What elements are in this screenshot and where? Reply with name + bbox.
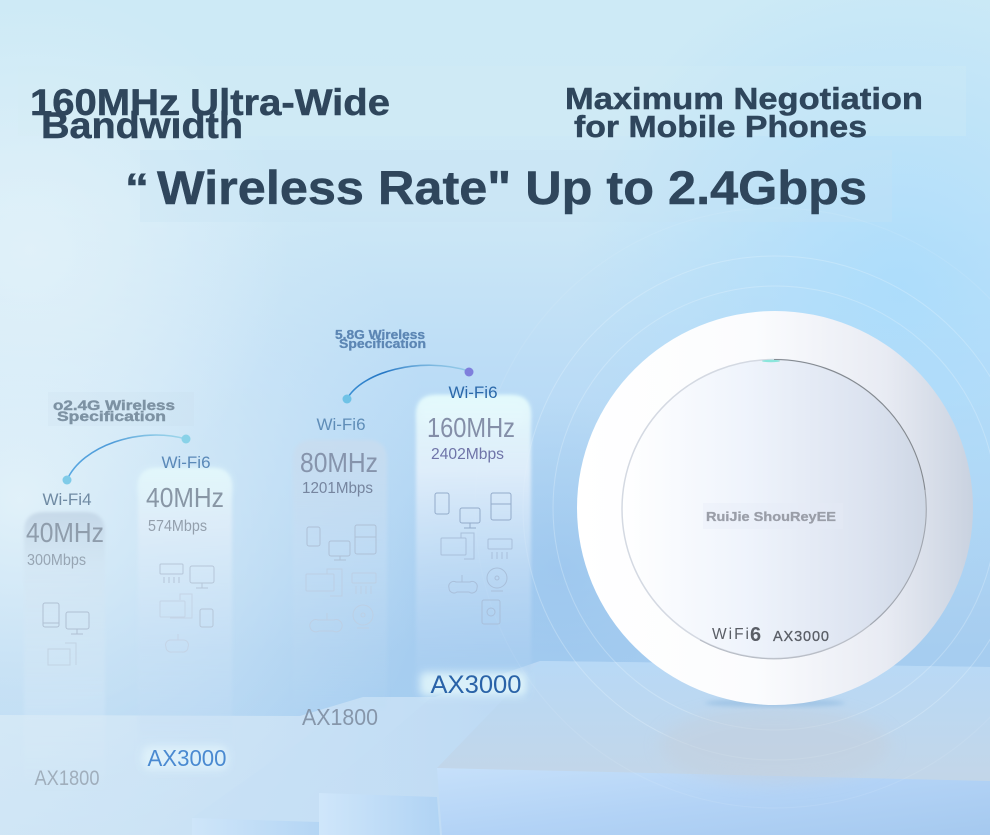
device icons: [306, 525, 376, 632]
heading: Maximum Negotiation for Mobile Phones: Maximum Negotiation: [565, 81, 923, 116]
label: 5.8G wireless specification: Specification: [339, 336, 426, 351]
stepped floor platforms: [0, 661, 990, 835]
heading: 160MHz Ultra-Wide Bandwidth: 160MHz Ultra-Wide: [30, 82, 390, 123]
column: Wi-Fi6 80MHz 1201Mbps AX1800: Wi-Fi6: [316, 415, 366, 434]
heading: Maximum Negotiation for Mobile Phones: for Mobile Phones: [574, 109, 867, 144]
column: Wi-Fi6 40MHz 574Mbps AX3000: 574Mbps: [148, 518, 207, 535]
column: Wi-Fi6 160MHz 2402Mbps AX3000: 2402Mbps: [431, 446, 504, 463]
column: Wi-Fi6 80MHz 1201Mbps AX1800: AX1800: [302, 704, 378, 730]
column: Wi-Fi6 80MHz 1201Mbps AX1800: 1201Mbps: [302, 480, 373, 497]
label: 5.8G wireless specification: [335, 327, 426, 351]
column: Wi-Fi6 160MHz 2402Mbps AX3000: Wi-Fi6: [448, 383, 498, 402]
label: 2.4G wireless specification: Specification: [57, 408, 166, 424]
column: Wi-Fi6 40MHz 574Mbps AX3000: [138, 453, 232, 771]
disk reflection: [660, 707, 890, 783]
model text: WiFi: [712, 626, 749, 643]
inner ring: [622, 359, 926, 659]
arc connector: 2.4G: [62, 434, 190, 484]
device icons: [160, 564, 214, 652]
model text: AX3000: [773, 629, 829, 645]
arc connector: 5.8G: [342, 365, 474, 404]
main title: Wireless Rate up to 2.4Gbps: Wireless Rate" Up to 2.4Gbps: [157, 161, 867, 214]
heading: Maximum Negotiation for Mobile Phones: [565, 81, 923, 144]
label: 5.8G wireless specification: 5.8G Wireless: [335, 327, 425, 342]
column: Wi-Fi6 40MHz 574Mbps AX3000: AX3000: [148, 745, 226, 771]
column: Wi-Fi4 40MHz 300Mbps AX1800: AX1800: [34, 767, 100, 790]
heading: 160MHz Ultra-Wide Bandwidth: [30, 82, 390, 146]
model text: [712, 624, 829, 646]
column: Wi-Fi6 160MHz 2402Mbps AX3000: 160MHz: [427, 412, 515, 443]
column: Wi-Fi6 160MHz 2402Mbps AX3000: [416, 383, 531, 699]
column: Wi-Fi6 80MHz 1201Mbps AX1800: 80MHz: [300, 447, 378, 478]
column: Wi-Fi4 40MHz 300Mbps AX1800: Wi-Fi4: [42, 490, 92, 509]
model text: 6: [750, 624, 761, 646]
device icons: [435, 493, 512, 624]
heading: 160MHz Ultra-Wide Bandwidth: Bandwidth: [41, 105, 243, 146]
column: Wi-Fi6 40MHz 574Mbps AX3000: 40MHz: [146, 482, 224, 513]
signal rings: [475, 208, 990, 808]
label: 2.4G wireless specification: [48, 392, 194, 426]
brand text: RuiJie ShouReyEE: [706, 509, 836, 524]
brand text: [703, 503, 843, 529]
main title: Wireless Rate up to 2.4Gbps: “: [125, 166, 149, 210]
device icons: [43, 603, 89, 665]
product: ceiling access point: [577, 311, 973, 707]
column: Wi-Fi6 80MHz 1201Mbps AX1800: [293, 415, 387, 730]
column: Wi-Fi4 40MHz 300Mbps AX1800: 300Mbps: [27, 552, 86, 569]
column: Wi-Fi4 40MHz 300Mbps AX1800: 40MHz: [26, 517, 104, 548]
column: Wi-Fi6 160MHz 2402Mbps AX3000: AX3000: [430, 671, 522, 699]
label: 2.4G wireless specification: o2.4G Wireless: [53, 397, 175, 413]
column: Wi-Fi6 40MHz 574Mbps AX3000: Wi-Fi6: [161, 453, 211, 472]
status light: [762, 360, 780, 362]
column: Wi-Fi4 40MHz 300Mbps AX1800: [24, 490, 105, 790]
